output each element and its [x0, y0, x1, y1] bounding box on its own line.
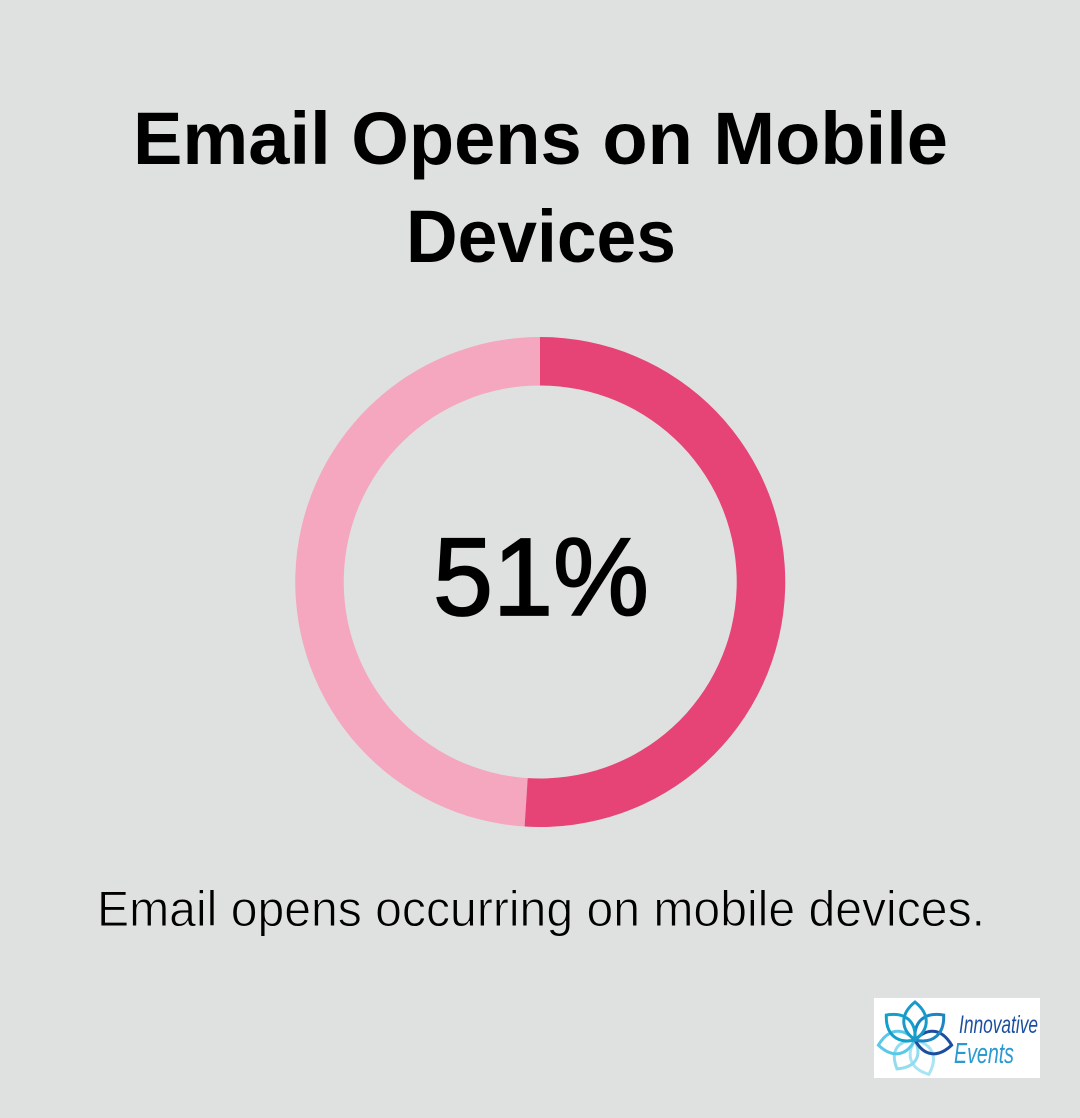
title: Devices	[406, 195, 676, 278]
logo wordmark: Innovative	[959, 1011, 1038, 1039]
logo wordmark	[954, 1011, 1038, 1070]
icon: flower	[877, 1002, 953, 1079]
donut chart: 51%	[295, 337, 785, 827]
percentage value: 51%	[433, 516, 649, 639]
logo wordmark: Events	[954, 1038, 1014, 1070]
title	[133, 97, 948, 278]
remaining segment	[295, 337, 540, 826]
highlighted segment	[525, 337, 785, 827]
description text: Email opens occurring on mobile devices.	[97, 881, 985, 937]
title: Email Opens on Mobile	[133, 97, 948, 180]
logo: Innovative Events	[874, 998, 1040, 1079]
